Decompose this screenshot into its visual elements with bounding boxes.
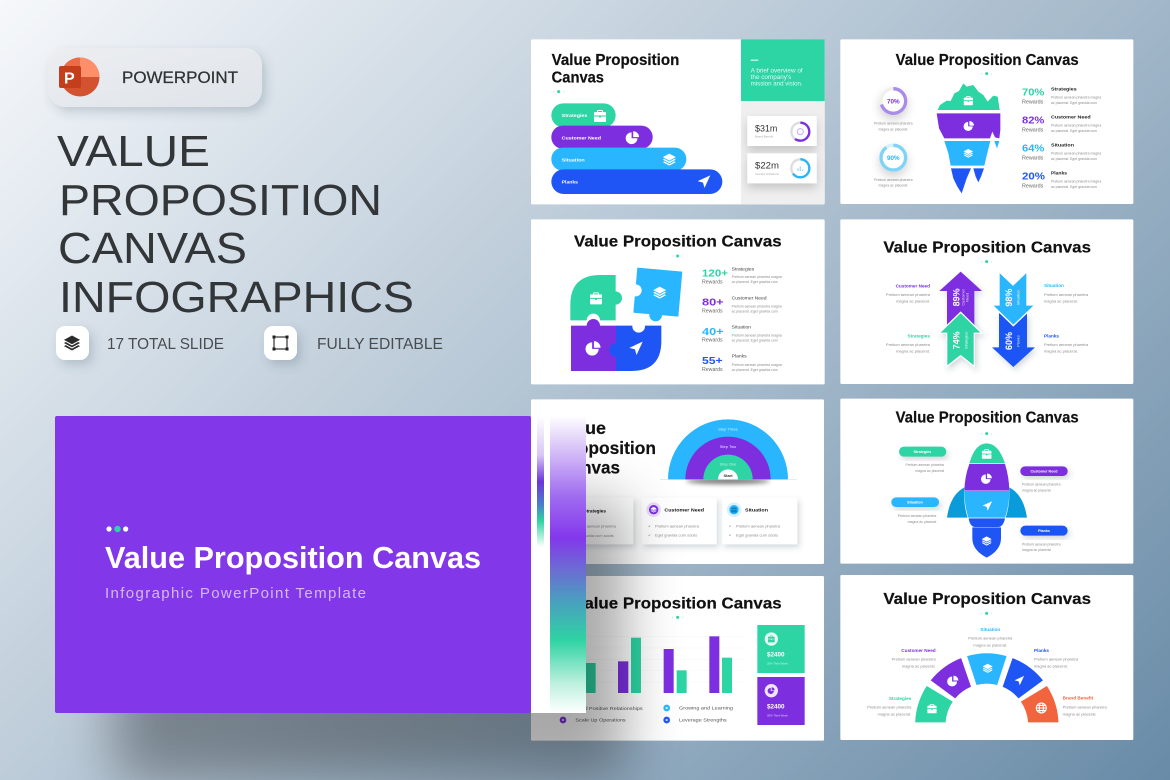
slide 2 heading: Value Proposition Canvas [896,52,1079,69]
label: brand benefit: Brand Benefit [1063,696,1094,701]
pill label: customer need: Customer Need [1030,469,1058,473]
slide 3 heading: Value Proposition Canvas [574,234,782,251]
icon: powerpoint logo [59,58,100,96]
stat: 82% customer need: Pretium aenean pharetra magna [1051,124,1101,128]
slide 5 heading: Canvas [559,457,620,477]
label: strategies: magna ac placerat. [896,349,930,354]
slide 8: arc segments [840,575,1133,740]
mission panel: the company's [751,75,791,81]
stat: 40+: Situation [732,325,751,331]
label: planks [1034,648,1079,668]
card: customer need: Eget gravida cum sociis [655,533,697,538]
label: customer need: Customer Need [896,283,930,288]
stats panel [741,101,825,204]
bar chart [563,636,743,693]
stat: 82% customer need: 82% [1022,115,1044,126]
label: situation: Pretium aenean pharetra [968,635,1013,640]
stat: 80+: ac placerat. Eget gravida cum [732,309,778,313]
card: customer need: Pretium aenean pharetra [655,523,700,528]
pill label: strategies: magna ac placerat [915,469,944,473]
stat: 64% situation: Situation [1051,142,1074,147]
stat: 20% planks: ac placerat. Eget gravida cum [1051,185,1097,189]
stat: 55+: 55+ [702,356,723,367]
arrow: purple up 89%: Customer [961,288,965,306]
stat: 20% planks: Pretium aenean pharetra magna [1051,180,1101,184]
stat: 80+: Customer Need [732,295,767,301]
pill label: strategies: Strategies [913,450,931,454]
cover dots [106,526,128,532]
stat: 70% strategies: ac placerat. Eget gravida cum [1051,101,1097,105]
label: situation: Situation [980,627,1000,632]
card: strategies: Eget gravida cum sociis [572,533,614,538]
stat: 55+: Pretium aenean pharetra magna [732,363,782,367]
slide 4 heading: Value Proposition Canvas [883,239,1091,256]
stat: 55+ [702,354,782,373]
stat: 20% planks [1022,170,1101,190]
label: situation: magna ac placerat. [973,642,1007,647]
iceberg graphic [937,83,1000,193]
stat: 120+: Pretium aenean pharetra magna [732,275,782,279]
donut 70%: Pretium aenean pharetra [874,122,913,126]
pill: strategies: Strategies [562,113,588,118]
label: strategies: magna ac placerat. [877,711,911,716]
powerpoint badge [48,48,262,107]
pill: customer need: Customer Need [562,135,601,140]
arrow: sky down 98%: Situation [1017,290,1021,305]
label: strategies: Pretium aenean pharetra [886,342,931,347]
donut 90%: magna ac placerat. [879,184,908,188]
donut 70%: 70% [887,98,900,105]
chart legend: Growing and Learning [679,705,733,710]
label: planks: Pretium aenean pharetra [1034,657,1079,662]
chart legend: Build Positive Relationships [575,706,643,711]
label: planks: magna ac placerat. [1034,663,1068,668]
cover subtitle: Infographic PowerPoint Template [105,585,366,602]
pill label: situation: Pretium aenean pharetra [898,514,936,518]
label: customer need [892,648,936,668]
stat: 120+: Rewards [702,279,723,285]
cover card [55,416,531,713]
slide 7 dots [672,616,683,619]
pill label: customer need [1020,466,1068,492]
stat: 80+: Rewards [702,309,723,315]
card: purple $2400: 20% Third Week [767,713,788,717]
stat: 64% situation [1022,142,1101,162]
stat: 120+ [702,266,782,285]
pill label: planks: Planks [1038,529,1050,533]
stat: 82% customer need: Rewards [1022,128,1044,134]
stat: 120+: 120+ [702,269,728,280]
card: situation: ✓ [729,524,732,528]
slide 6: rocket [840,399,1133,564]
label: planks: Planks [1034,648,1049,653]
card: customer need: ✓ [648,524,651,528]
feature: total slides [56,326,224,360]
cover card drop shadow [115,500,625,780]
semicircle steps: Step Three [718,427,739,432]
semicircle steps: Start [723,473,733,478]
label: planks: magna ac placerat. [1044,349,1078,354]
pill label: situation: Situation [907,500,923,504]
stat card: $22m: Investor Relations [755,172,779,176]
arc segment: situation [967,653,1007,685]
arrow: purple up 89%: Need [966,293,970,302]
stat: 70% strategies [1022,86,1101,106]
semicircle steps: Step One [720,461,737,466]
stat card: $31m: $31m [755,124,778,134]
slide 7 heading: Value Proposition Canvas [574,595,782,612]
stat: 70% strategies: Strategies [1051,86,1077,91]
semicircle steps [660,419,797,484]
donut 90%: 90% [887,155,900,162]
stat: 82% customer need: Customer Need [1051,114,1091,119]
main title: PROPOSITION [59,176,382,225]
label: strategies [867,696,912,716]
donut 70% [874,89,913,131]
stat: 64% situation: Pretium aenean pharetra magna [1051,152,1101,156]
card: strategies: Strategies [583,509,606,514]
label: planks: Pretium aenean pharetra [1044,342,1089,347]
card: situation: ✓ [729,534,732,538]
main title: CANVAS [58,224,247,273]
stat: 70% strategies: Pretium aenean pharetra magna [1051,96,1101,100]
pill label: strategies [899,447,946,473]
label: strategies [886,334,931,354]
label: brand benefit: Pretium aenean pharetra [1063,705,1108,710]
slide 2 dots [981,72,992,75]
slide 6 heading: Value Proposition Canvas [896,410,1079,427]
mission panel: A brief overview of [751,68,803,74]
pill label: planks: magna ac placerat [1022,548,1051,552]
stat: 70% strategies: 70% [1022,88,1044,99]
stat card: $31m: Brand Benefit [755,135,773,139]
gradient strip overlay [531,416,586,713]
arc segment: planks [1003,658,1043,698]
label: situation: Situation [1044,283,1064,288]
chart legend: Leverage Strengths [679,718,727,723]
mission panel [741,39,825,101]
arrow: teal up 74% [939,312,982,367]
arrow: blue down 60% [992,313,1035,367]
label: situation: magna ac placerat. [1044,299,1078,304]
arrow: blue down 60%: Planks [1017,335,1021,347]
card: situation: Situation [745,508,768,513]
arc segment: brand benefit [1021,686,1058,722]
main title: VALUE [57,127,210,176]
slide 1 dots [553,90,564,93]
pill label: planks [1020,526,1068,552]
feature: total slides: 17 TOTAL SLIDE [107,336,224,353]
stat: 20% planks: 20% [1022,171,1045,182]
stat: 40+ [702,325,782,344]
rocket graphic [947,443,1027,558]
label: brand benefit: magna ac placerat. [1063,711,1097,716]
card: customer need: Customer Need [664,508,704,513]
slide 1 heading: Canvas [552,70,604,87]
pill label: planks: Pretium aenean pharetra [1022,542,1061,546]
stat: 20% planks: Planks [1051,170,1067,175]
stat: 55+: Rewards [702,367,723,373]
slide 5 heading [559,418,656,477]
stat: 64% situation: 64% [1022,143,1044,154]
label: customer need: Pretium aenean pharetra [892,657,936,662]
donut 90%: Pretium aenean pharetra [874,178,913,182]
stat: 20% planks: Rewards [1022,184,1044,190]
stat: 40+: Pretium aenean pharetra magna [732,334,782,338]
main title: INFOGRAPHICS [59,273,414,322]
card: situation [722,498,797,544]
arc segment: customer need [931,658,971,698]
feature: fully editable [264,326,443,360]
label: brand benefit [1063,696,1108,716]
arrow: purple up 89% [939,272,982,327]
slide 5: semicircle steps [531,399,824,564]
stat card: $22m [747,153,817,183]
arrow: teal up 74%: Strategies [965,332,969,349]
donut 70%: magna ac placerat. [879,127,908,131]
pill label: customer need: Pretium aenean pharetra [1022,483,1061,487]
semicircle steps: Step Two [720,444,737,449]
label: strategies: Strategies [907,334,930,339]
slide 8 heading: Value Proposition Canvas [883,591,1091,608]
label: situation: Pretium aenean pharetra [1044,292,1089,297]
main title [57,127,414,322]
card: customer need [642,498,717,544]
pill: customer need [551,126,653,149]
stat: 70% strategies: Rewards [1022,100,1044,106]
label: customer need: Customer Need [901,648,936,653]
stat: 40+: 40+ [702,327,724,338]
chart legend: Scale Up Operations [575,718,626,723]
arrow: blue down 60%: 60% [1004,332,1014,350]
feature: fully editable: FULLY EDITABLE [317,336,443,353]
slide 1: stacked pills [531,39,825,204]
stat: 80+: Pretium aenean pharetra magna [732,304,782,308]
label: strategies: Pretium aenean pharetra [867,705,912,710]
pill label: customer need: magna ac placerat [1022,488,1051,492]
stat card: $22m: $22m [755,161,779,171]
card: situation: Pretium aenean pharetra [736,523,781,528]
label: planks [1044,333,1089,354]
card: teal $2400: 20% Third Week [767,661,788,665]
slide 1 heading [552,52,679,87]
label: customer need [886,283,931,304]
stat: 80+: 80+ [702,298,724,309]
slide 7: bar chart [531,576,824,741]
pill label: situation [891,497,939,524]
card: purple $2400 [757,677,805,725]
puzzle graphic [570,268,682,371]
label: situation [1044,283,1089,304]
badge label: POWERPOINT [122,69,238,87]
slide 4: arrows [840,219,1133,384]
stat card: $31m [747,116,817,146]
slide 3 dots [672,254,683,257]
pill: situation: Situation [562,157,585,162]
slide 5 heading: Value [559,418,606,438]
stat: 40+: Rewards [702,338,723,344]
pill label: situation: magna ac placerat [908,520,936,524]
slide 5 heading: Proposition [559,438,656,458]
stat: 82% customer need: ac placerat. Eget gravida cum [1051,129,1097,133]
stat: 120+: ac placerat. Eget gravida cum [732,280,778,284]
slide 1 heading: Value Proposition [552,52,679,69]
slide 8 dots [981,612,992,615]
cover title: Value Proposition Canvas [105,540,481,575]
icon: powerpoint logo: P [64,70,75,88]
label: customer need: Pretium aenean pharetra [886,292,931,297]
chart legend [560,705,733,723]
mission panel: mission and vision. [751,82,803,88]
stat: 64% situation: ac placerat. Eget gravida cum [1051,157,1097,161]
stat: 55+: Planks [732,354,747,360]
card: purple $2400: $2400 [767,703,785,710]
stat: 40+: ac placerat. Eget gravida cum [732,339,778,343]
slide 3: puzzle [531,219,825,384]
pill label: strategies: Pretium aenean pharetra [905,463,944,467]
pill: planks [551,169,722,194]
label: situation [968,627,1013,647]
stat: 120+: Strategies [732,266,755,272]
pill: strategies [551,103,616,127]
slide 6 dots [981,432,992,435]
label: planks: Planks [1044,333,1059,338]
card: teal $2400: $2400 [767,651,785,658]
stat: 55+: ac placerat. Eget gravida cum [732,368,778,372]
slide 2: iceberg [840,39,1133,204]
donut 90% [874,145,913,188]
label: customer need: magna ac placerat. [902,663,936,668]
arrow: teal up 74%: 74% [952,331,962,349]
arrow: purple up 89%: 89% [952,288,962,306]
card: strategies: Pretium aenean pharetra [572,524,617,529]
stat: 80+ [702,295,782,315]
pill: situation [551,148,686,171]
card: teal $2400 [757,625,805,673]
arrow: sky down 98%: 98% [1004,289,1014,307]
stat: 82% customer need [1022,114,1101,134]
arc segment: strategies [915,686,953,722]
label: strategies: Strategies [889,696,912,701]
slide 4 dots [981,260,992,263]
label: customer need: magna ac placerat. [896,299,930,304]
card: customer need: ✓ [648,534,651,538]
card: situation: Eget gravida cum sociis [736,533,778,538]
arrow: sky down 98% [992,272,1035,326]
stat: 64% situation: Rewards [1022,156,1044,162]
card: strategies [562,498,633,544]
pill: planks: Planks [562,179,578,184]
